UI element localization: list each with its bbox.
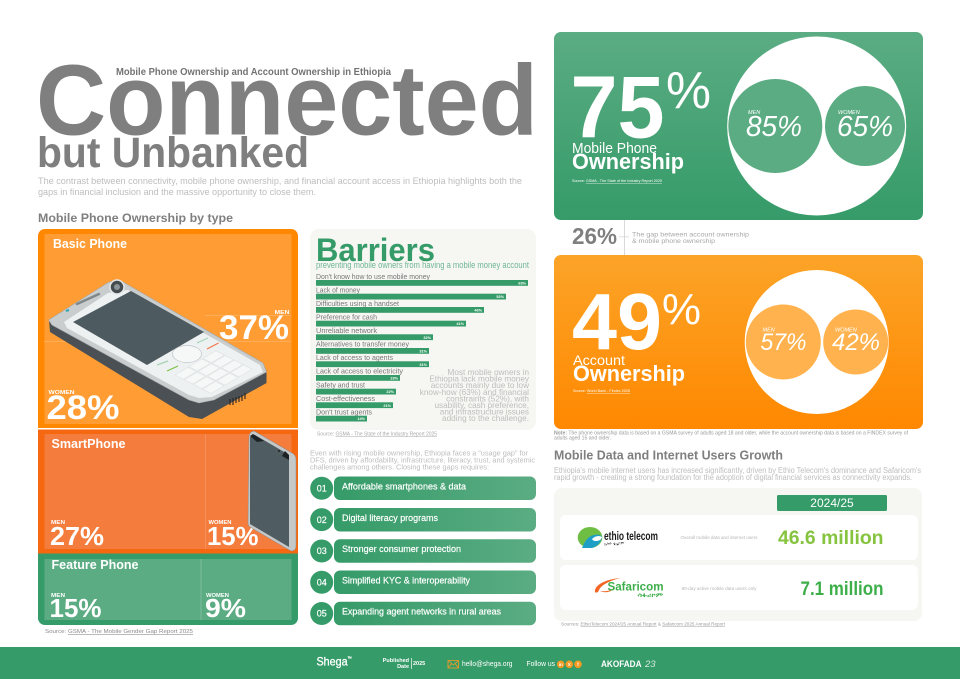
item 01: 01 [317,484,327,494]
bar chart: barriers: 23% [390,376,399,380]
item 05: 05 [317,609,327,619]
chart: gender circles: 65% [837,111,893,143]
item 04: Simplified KYC & interoperability [342,575,470,586]
row: ethio telecom: 46.6 million [778,528,884,549]
stat: men 37%: 37% [219,309,289,347]
panel: basic phone [38,229,298,428]
heading: basic phone: Basic Phone [53,237,127,251]
icon: envelope [448,660,458,668]
bar chart: barriers: Unreliable network [316,326,377,335]
item 05: Expanding agent networks in rural areas [342,607,501,618]
panel: smartphone [38,430,298,554]
published date: 2025 [413,661,425,667]
follow us: Follow us [526,661,555,668]
akofada 23: AKOFADA [601,659,642,669]
logo: safaricom: Safaricom [608,582,664,594]
bar chart: barriers: Don't trust agents [316,408,372,416]
stat: 49%: % [662,285,701,334]
heading: phone ownership by type: Mobile Phone Ownership by type [38,211,233,225]
title: Connected: Connected [36,44,538,156]
title block [36,44,538,177]
item 02 [310,508,536,532]
bar chart: barriers: Lack of access to agents [316,353,393,362]
text: barriers summary: constraints (52%), with [446,394,529,403]
published date: Date [397,664,409,670]
text: barriers summary: Ethiopia lack mobile money [429,375,530,384]
source: barriers: Source: GSMA - The State of the Industry Report 2025 [317,432,437,438]
stat: men 27%: 27% [50,521,104,551]
heading: barriers: Barriers [316,232,435,268]
header: 2024/25: 2024/25 [810,496,854,510]
bar chart: barriers: Preference for cash [316,312,377,322]
stat: women 9%: WOMEN [206,593,229,599]
icon: basic mobile phone [49,280,266,419]
bar chart: barriers: Difficulties using a handset [316,299,400,308]
subtitle: Mobile Phone Ownership and Account Ownership in Ethiopia [116,67,391,78]
text: barriers summary: accounts mainly due to low [431,381,529,390]
text: usage gap: challenges among others. Closing these gaps requires: [310,462,489,472]
email: hello@shega.org [462,659,512,668]
stat: 75% [570,58,711,156]
stat: men 15%: 15% [50,593,102,623]
note [554,430,909,442]
chart: gender circles [727,36,906,216]
stat: 49%: 49 [572,277,662,366]
icon: smartphone [248,431,296,551]
label: mobile phone ownership: Ownership [572,149,684,174]
published date: Published [383,658,409,664]
text: barriers summary: know-how (63%) and financial [420,388,529,397]
text: barriers summary [420,368,530,423]
follow us: f [577,662,579,667]
akofada 23: 23 [644,659,656,670]
bar chart: barriers: 63% [518,282,527,286]
stat: women 9%: 9% [205,593,246,623]
row: safaricom: 90-day active mobile data users only [682,586,757,591]
intro text: gaps in financial inclusion and the massive opportunity to close them. [38,186,316,197]
panel: phone ownership by type [38,229,298,625]
chart: gender circles: WOMEN [835,328,857,334]
stat: men 27%: MEN [51,520,65,526]
panel: feature phone [38,554,298,625]
heading: mobile data growth: Mobile Data and Internet Users Growth [554,448,783,462]
item 03 [310,539,536,563]
panel: mobile phone ownership [554,32,923,220]
bar chart: barriers: 32% [423,336,432,340]
callout: 26% gap: The gap between account ownership [632,232,749,238]
title: but Unbanked: but Unbanked [37,129,309,177]
panel: barriers [310,229,536,430]
header: 2024/25 [777,495,887,511]
label: account ownership: Ownership [573,361,685,386]
logo: ethio telecom [578,527,658,548]
panel: mobile data table [554,488,922,621]
bar chart: barriers: 22% [386,390,395,394]
text: usage gap [310,448,535,472]
item 03: Stronger consumer protection [342,544,461,555]
logo: Shega: TM [348,656,352,660]
bar chart: barriers: Lack of access to electricity [316,367,403,376]
source: mobile data: Sources: EthioTelecom 2024/25 Annual Report & Safaricom 2025 Annual Report [561,622,726,626]
text: barriers summary: and infrastructure issues [440,408,529,417]
text: usage gap: DFS, driven by affordability, infrastructure, literacy, trust, and systemic [310,456,535,464]
text: barriers summary: Most mobile owners in [448,368,529,377]
bar chart: barriers: 14% [357,417,366,421]
item 02: Digital literacy programs [342,513,438,524]
row: safaricom [560,565,918,610]
bar chart: barriers: Safety and trust [316,380,366,389]
intro text: The contrast between connectivity, mobile phone ownership, and financial account access in Ethiopia highlights both the [38,175,522,186]
row: ethio telecom: Overall mobile data and internet users [680,535,758,540]
text: mobile data intro [554,466,921,482]
item 03: 03 [317,546,327,556]
stat: 75%: % [666,62,711,120]
heading: smartphone: SmartPhone [52,437,126,451]
callout: 26% gap: & mobile phone ownership [632,238,715,245]
item 04: 04 [317,577,327,587]
item 04 [310,570,536,594]
logo: safaricom [595,578,664,599]
bar chart: barriers: 46% [474,308,483,312]
bar chart: barriers: 21% [383,404,392,408]
subheading: barriers: preventing mobile owners from having a mobile money account [316,260,529,270]
note: Note: The phone ownership data is based on a GSMA survey of adults aged 18 and older, while the account ownership data is based on a FINDEX survey of [554,430,909,436]
logo: ethio telecom: ethio telecom [604,531,658,543]
list: closing the gaps [310,476,536,625]
callout: 26% gap: 26% [572,223,617,249]
label: mobile phone ownership: Mobile Phone [572,141,657,157]
label: account ownership: Account [573,352,625,368]
item 02: 02 [317,515,327,525]
follow us: in [559,662,563,667]
stat: 75%: 75 [570,58,664,156]
stat: women 15%: WOMEN [208,520,232,526]
chart: gender circles [745,270,889,414]
stat: women 28%: WOMEN [48,390,75,396]
bar chart: barriers: 52% [496,295,505,299]
stat: women 28%: 28% [46,389,120,427]
stat: women 15%: 15% [207,521,258,551]
logo: ethio telecom: ኢትዮ ቴሌኮም [604,541,624,546]
footer [0,647,960,679]
logo: safaricom: ሳፋሪኮም [638,593,664,599]
row: ethio telecom [560,515,918,560]
chart: gender circles: WOMEN [838,110,860,116]
callout: 26% gap [572,220,749,255]
bar chart: barriers: 31% [419,363,428,367]
text: barriers summary: usability, cash preference, [434,401,529,410]
item 01: Affordable smartphones & data [342,482,467,492]
text: barriers summary: adding to the challenge. [442,414,529,423]
chart: gender circles: 57% [760,329,806,356]
text: mobile data intro: rapid growth - creating a strong foundation for the adoption of digital financial services as connectivity expands. [554,473,912,482]
stat: men 37%: MEN [274,310,290,316]
row: safaricom: 7.1 million [800,579,884,600]
text: usage gap: Even with rising mobile ownership, Ethiopia faces a “usage gap” for [310,448,528,458]
item 01 [310,476,536,500]
stat: men 15%: MEN [51,593,65,599]
item 05 [310,602,536,625]
published date [383,658,425,670]
source: Source: GSMA - The State of the Industry Report 2025 [572,179,662,183]
intro text [38,175,522,197]
chart: gender circles: MEN [762,328,775,334]
bar chart: barriers [316,272,528,422]
note: adults aged 15 and older. [554,436,611,442]
stat: 49% [572,277,701,366]
chart: gender circles: 85% [746,111,802,143]
chart: gender circles: MEN [748,110,760,116]
source: phone ownership: Source: GSMA - The Mobile Gender Gap Report 2025 [45,629,193,635]
follow us [526,660,582,668]
bar chart: barriers: Cost-effectiveness [316,394,375,403]
panel: account ownership [554,255,923,429]
bar chart: barriers: 31% [419,350,428,354]
heading: feature phone: Feature Phone [52,558,138,572]
logo: Shega: Shega [316,654,351,668]
source: Source: World Bank - Findex 2025 [573,389,630,393]
bar chart: barriers: Don't know how to use mobile money [316,272,430,281]
bar chart: barriers: 41% [456,322,465,326]
chart: gender circles: 42% [832,329,880,356]
text: mobile data intro: Ethiopia's mobile internet users has increased significantly, driven by Ethio Telecom's dominance and Safaricom's [554,466,921,475]
bar chart: barriers: Lack of money [316,286,360,294]
bar chart: barriers: Alternatives to transfer money [316,340,409,349]
follow us: X [568,662,571,667]
